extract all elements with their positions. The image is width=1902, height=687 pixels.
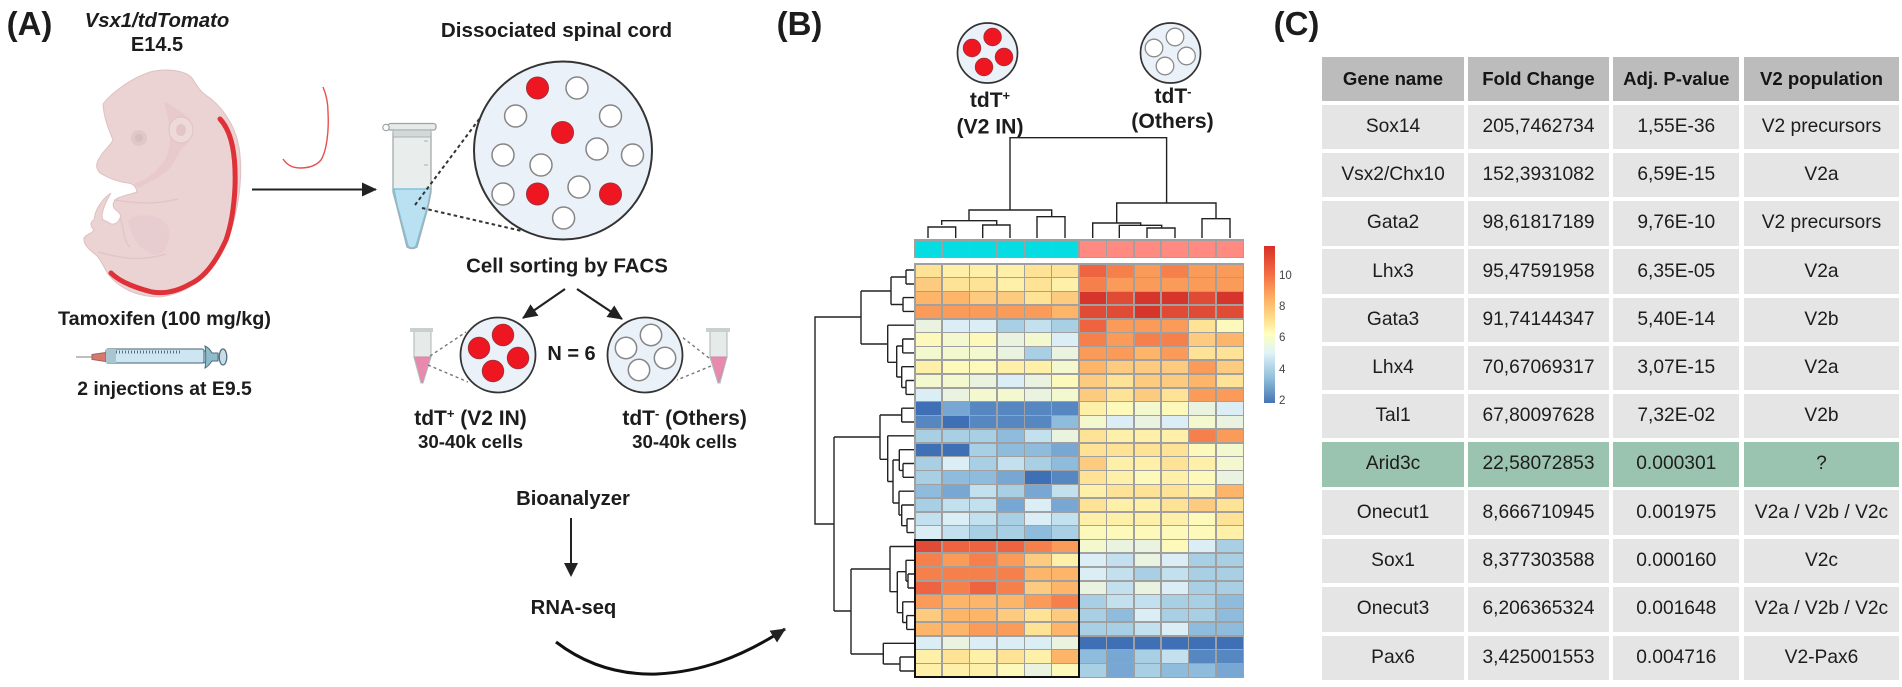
row: Sox1 — [1322, 539, 1899, 583]
row: Pax6 — [1322, 636, 1899, 680]
arrow: bioanalyzer to RNA-seq — [564, 518, 578, 577]
curved arrow to heatmap — [556, 629, 785, 674]
panel A: experimental workflow — [7, 5, 785, 674]
row: Onecut1: Onecut1 — [1357, 502, 1429, 523]
tamoxifen dose text: Tamoxifen (100 mg/kg) — [58, 308, 271, 330]
row: Arid3c highlighted: 0.000301 — [1636, 453, 1716, 474]
icon: E14.5 embryo — [84, 70, 241, 297]
label: tdT+ sample — [414, 406, 527, 452]
row: Lhx4: Lhx4 — [1372, 357, 1414, 378]
icon: tube with dissociated cells — [383, 124, 436, 248]
icon: small pink tube left — [410, 328, 433, 383]
row: Lhx3 — [1322, 249, 1899, 294]
row: Sox14 — [1322, 105, 1899, 149]
zoom lines right — [677, 337, 711, 380]
row: Onecut1: 8,666710945 — [1482, 502, 1594, 523]
row: Lhx4: 3,07E-15 — [1637, 357, 1715, 378]
row: Gata2: 98,61817189 — [1482, 212, 1594, 233]
mouse line heading: E14.5 — [131, 34, 183, 56]
label: tdT- sample: (Others) — [659, 407, 747, 430]
label: tdT- sample: - — [655, 406, 659, 421]
row: Lhx3: 6,35E-05 — [1637, 261, 1715, 282]
icon: small pink tube right — [706, 328, 730, 383]
row: Vsx2/Chx10 — [1322, 153, 1899, 197]
panel label B: (B) — [777, 5, 822, 42]
panel B header: labels and dendrograms — [777, 5, 1230, 671]
colour scale legend: 6 — [1279, 332, 1285, 344]
row: Arid3c highlighted — [1322, 442, 1899, 487]
row: Sox1: 8,377303588 — [1482, 550, 1594, 571]
zoom lines left — [428, 332, 468, 382]
mouse line heading — [85, 10, 229, 56]
row: Gata3 — [1322, 298, 1899, 342]
label: tdT- sample: tdT — [622, 407, 655, 430]
row: Sox14: Sox14 — [1366, 116, 1420, 137]
row: Pax6: 0.004716 — [1636, 647, 1716, 668]
label: tdT- (Others): (Others) — [1131, 110, 1214, 133]
column dendrogram — [928, 138, 1230, 238]
colour scale legend: 2 — [1279, 395, 1285, 407]
panel label C: (C) — [1274, 5, 1319, 42]
injection timing text: 2 injections at E9.5 — [77, 378, 252, 400]
row: Gata3: 91,74144347 — [1482, 309, 1594, 330]
row: Onecut3: Onecut3 — [1357, 598, 1429, 619]
colour scale legend: 8 — [1279, 301, 1285, 313]
row: Gata3: 5,40E-14 — [1637, 309, 1715, 330]
colour scale legend — [1264, 246, 1292, 407]
row: Onecut1: V2a / V2b / V2c — [1755, 502, 1888, 523]
row: Gata3: Gata3 — [1367, 309, 1419, 330]
row: Vsx2/Chx10: V2a — [1804, 164, 1839, 185]
panel C: gene table — [1322, 57, 1899, 680]
colour scale legend: 4 — [1279, 364, 1285, 376]
arrows: sorting split — [523, 289, 622, 319]
highlighted cluster box — [914, 539, 1080, 678]
panel label A: (A) — [7, 5, 52, 42]
row: Sox1: 0.000160 — [1636, 550, 1716, 571]
heatmap group annotation bar — [914, 239, 1244, 258]
label: tdT- sample: 30-40k cells — [632, 431, 737, 452]
row: Onecut1 — [1322, 490, 1899, 535]
label: tdT- (Others): tdT — [1154, 85, 1187, 108]
big circle: dissociated spinal cord cells — [474, 62, 652, 240]
row: Gata2: 9,76E-10 — [1637, 212, 1715, 233]
row: Tal1 — [1322, 394, 1899, 438]
row: Onecut3: 6,206365324 — [1482, 598, 1594, 619]
spinal cord stripe — [111, 119, 235, 293]
tdT+ population circle — [460, 318, 536, 392]
icon: syringe — [76, 346, 227, 368]
label: tdT- sample — [622, 406, 747, 452]
label: tdT+ (V2 IN) — [956, 88, 1024, 138]
row dendrogram — [815, 270, 914, 671]
label: tdT+ sample: tdT — [414, 407, 447, 430]
row: Vsx2/Chx10: Vsx2/Chx10 — [1341, 164, 1445, 185]
text: bioanalyzer: Bioanalyzer — [516, 488, 630, 510]
arrow: embryo to tube — [252, 188, 376, 190]
row: Lhx4: 70,67069317 — [1482, 357, 1594, 378]
row: Gata3: V2b — [1804, 309, 1839, 330]
row: Tal1: Tal1 — [1375, 405, 1411, 426]
label: tdT+ (V2 IN): + — [1003, 88, 1011, 103]
table header — [1322, 57, 1899, 101]
label: tdT+ sample: + — [447, 406, 455, 421]
row: Arid3c highlighted: Arid3c — [1366, 453, 1420, 474]
tdT- group icon — [1140, 23, 1200, 83]
label: tdT+ (V2 IN): (V2 IN) — [956, 116, 1024, 138]
sample number: N = 6 — [547, 343, 596, 365]
label: tdT- (Others) — [1131, 84, 1214, 133]
row: Onecut1: 0.001975 — [1636, 502, 1716, 523]
table header: Gene name — [1343, 68, 1443, 89]
row: Tal1: 7,32E-02 — [1637, 405, 1715, 426]
dissected spinal cord red curve — [283, 87, 328, 168]
table header: V2 population — [1760, 68, 1883, 89]
row: Gata2 — [1322, 201, 1899, 246]
row: Lhx4 — [1322, 346, 1899, 390]
row: Lhx3: 95,47591958 — [1482, 261, 1594, 282]
label: tdT+ (V2 IN): tdT — [970, 89, 1003, 112]
tdT- population circle — [608, 318, 682, 392]
row: Vsx2/Chx10: 152,3931082 — [1482, 164, 1594, 185]
row: Lhx3: V2a — [1804, 261, 1839, 282]
row: Arid3c highlighted: ? — [1816, 453, 1827, 474]
row: Sox14: V2 precursors — [1762, 116, 1881, 137]
row: Lhx4: V2a — [1804, 357, 1839, 378]
heading: cell sorting: Cell sorting by FACS — [466, 256, 668, 278]
label: tdT- (Others): - — [1187, 84, 1192, 99]
row: Onecut3 — [1322, 587, 1899, 632]
label: tdT+ sample: (V2 IN) — [454, 407, 527, 430]
table header: Fold Change — [1482, 68, 1595, 89]
mouse line heading: Vsx1/tdTomato — [85, 10, 229, 32]
text: RNA-seq: RNA-seq — [531, 597, 616, 619]
heatmap — [914, 263, 1244, 678]
row: Tal1: V2b — [1804, 405, 1839, 426]
row: Gata2: Gata2 — [1367, 212, 1419, 233]
zoom dotted lines — [415, 118, 522, 231]
row: Pax6: Pax6 — [1371, 647, 1415, 668]
table header: Adj. P-value — [1623, 68, 1730, 89]
row: Sox1: V2c — [1805, 550, 1838, 571]
row: Pax6: V2-Pax6 — [1785, 647, 1858, 668]
row: Sox14: 205,7462734 — [1482, 116, 1594, 137]
row: Onecut3: V2a / V2b / V2c — [1755, 598, 1888, 619]
heading: dissociated spinal cord: Dissociated spinal cord — [441, 19, 672, 42]
row: Vsx2/Chx10: 6,59E-15 — [1637, 164, 1715, 185]
row: Sox1: Sox1 — [1371, 550, 1415, 571]
row: Onecut3: 0.001648 — [1636, 598, 1716, 619]
colour scale legend: 10 — [1279, 270, 1292, 282]
row: Tal1: 67,80097628 — [1482, 405, 1594, 426]
row: Gata2: V2 precursors — [1762, 212, 1881, 233]
row: Sox14: 1,55E-36 — [1637, 116, 1715, 137]
row: Pax6: 3,425001553 — [1482, 647, 1594, 668]
tdT+ group icon — [958, 23, 1018, 83]
row: Lhx3: Lhx3 — [1372, 261, 1414, 282]
row: Arid3c highlighted: 22,58072853 — [1482, 453, 1594, 474]
label: tdT+ sample: 30-40k cells — [418, 431, 523, 452]
